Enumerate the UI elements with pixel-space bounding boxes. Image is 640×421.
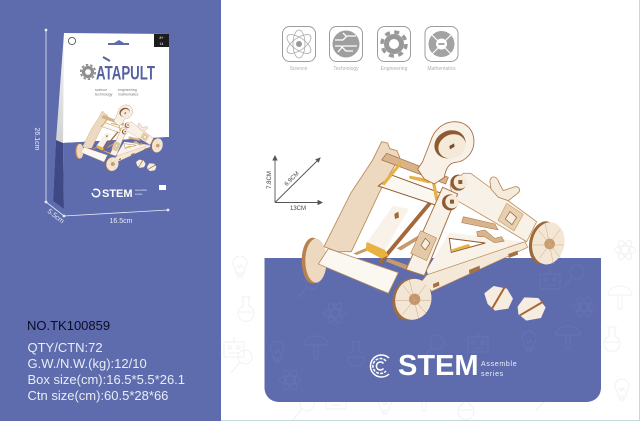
STEM logo mark xyxy=(370,355,389,377)
atom glyph xyxy=(284,30,314,58)
small C logo xyxy=(92,189,100,197)
technology label: Technology xyxy=(333,66,359,72)
specification list: Ctn size(cm):60.5*28*66 xyxy=(28,388,168,403)
product title: ATAPULT xyxy=(96,64,155,84)
gear glyph xyxy=(382,32,406,56)
specification list: Box size(cm):16.5*5.5*26.1 xyxy=(28,372,185,387)
stem words: mathematics xyxy=(118,92,139,96)
hang hole tab xyxy=(108,40,129,45)
circuit glyph xyxy=(332,30,360,58)
STEM wordmark: STEM xyxy=(398,350,479,382)
stem words: engineering xyxy=(118,88,137,92)
small STEM word: STEM xyxy=(102,188,133,200)
title arm accent xyxy=(103,57,110,61)
math dial glyph xyxy=(428,31,454,57)
gusset lower band xyxy=(53,140,64,209)
size axes xyxy=(273,156,322,204)
box front white xyxy=(63,33,169,143)
width label: 16.5cm xyxy=(110,218,133,225)
main catapult photo xyxy=(302,122,568,324)
age badge: 8+ xyxy=(160,36,164,40)
assemble series text: Assemble xyxy=(481,361,517,368)
box front blue xyxy=(63,137,169,209)
stem words: technology xyxy=(95,92,113,96)
mathematics label: Mathematics xyxy=(427,66,456,72)
engineering label: Engineering xyxy=(381,66,408,72)
height measure: 7.8CM xyxy=(267,171,273,189)
width measure: 13CM xyxy=(290,206,306,212)
faint background icons on white xyxy=(224,238,636,420)
box side gusset xyxy=(53,33,64,209)
small series text: assemble xyxy=(135,188,147,192)
specification list: G.W./N.W.(kg):12/10 xyxy=(28,356,147,371)
science icon xyxy=(282,26,316,72)
box dimension lines xyxy=(45,29,169,217)
brand badge xyxy=(68,37,76,45)
depth measure: 6.9CM xyxy=(284,171,301,188)
model number: NO.TK100859 xyxy=(27,318,110,333)
height label: 26.1cm xyxy=(33,128,40,151)
science label: Science xyxy=(290,66,308,72)
stem words xyxy=(95,88,139,96)
assemble series text: series xyxy=(481,371,504,378)
specification list: QTY/CTN:72 xyxy=(28,340,103,355)
small series text xyxy=(135,188,147,196)
small recycle mark xyxy=(159,185,166,190)
blue product panel xyxy=(264,258,601,402)
small catapult photo xyxy=(75,105,164,172)
small series text: series xyxy=(135,192,143,196)
age badge: 14 xyxy=(160,42,163,46)
technology icon xyxy=(330,26,362,72)
assemble series text xyxy=(481,361,517,378)
packaging box xyxy=(53,33,169,209)
engineering icon xyxy=(378,26,410,72)
specification list xyxy=(28,340,185,403)
gear icon xyxy=(81,65,95,79)
age badge xyxy=(154,34,169,47)
frame edge xyxy=(221,0,640,421)
faint icons on blue panel xyxy=(270,265,595,392)
stem words: science xyxy=(95,88,107,92)
mathematics icon xyxy=(425,26,458,72)
left panel background xyxy=(0,0,221,421)
depth label: 5.5cm xyxy=(46,208,65,225)
